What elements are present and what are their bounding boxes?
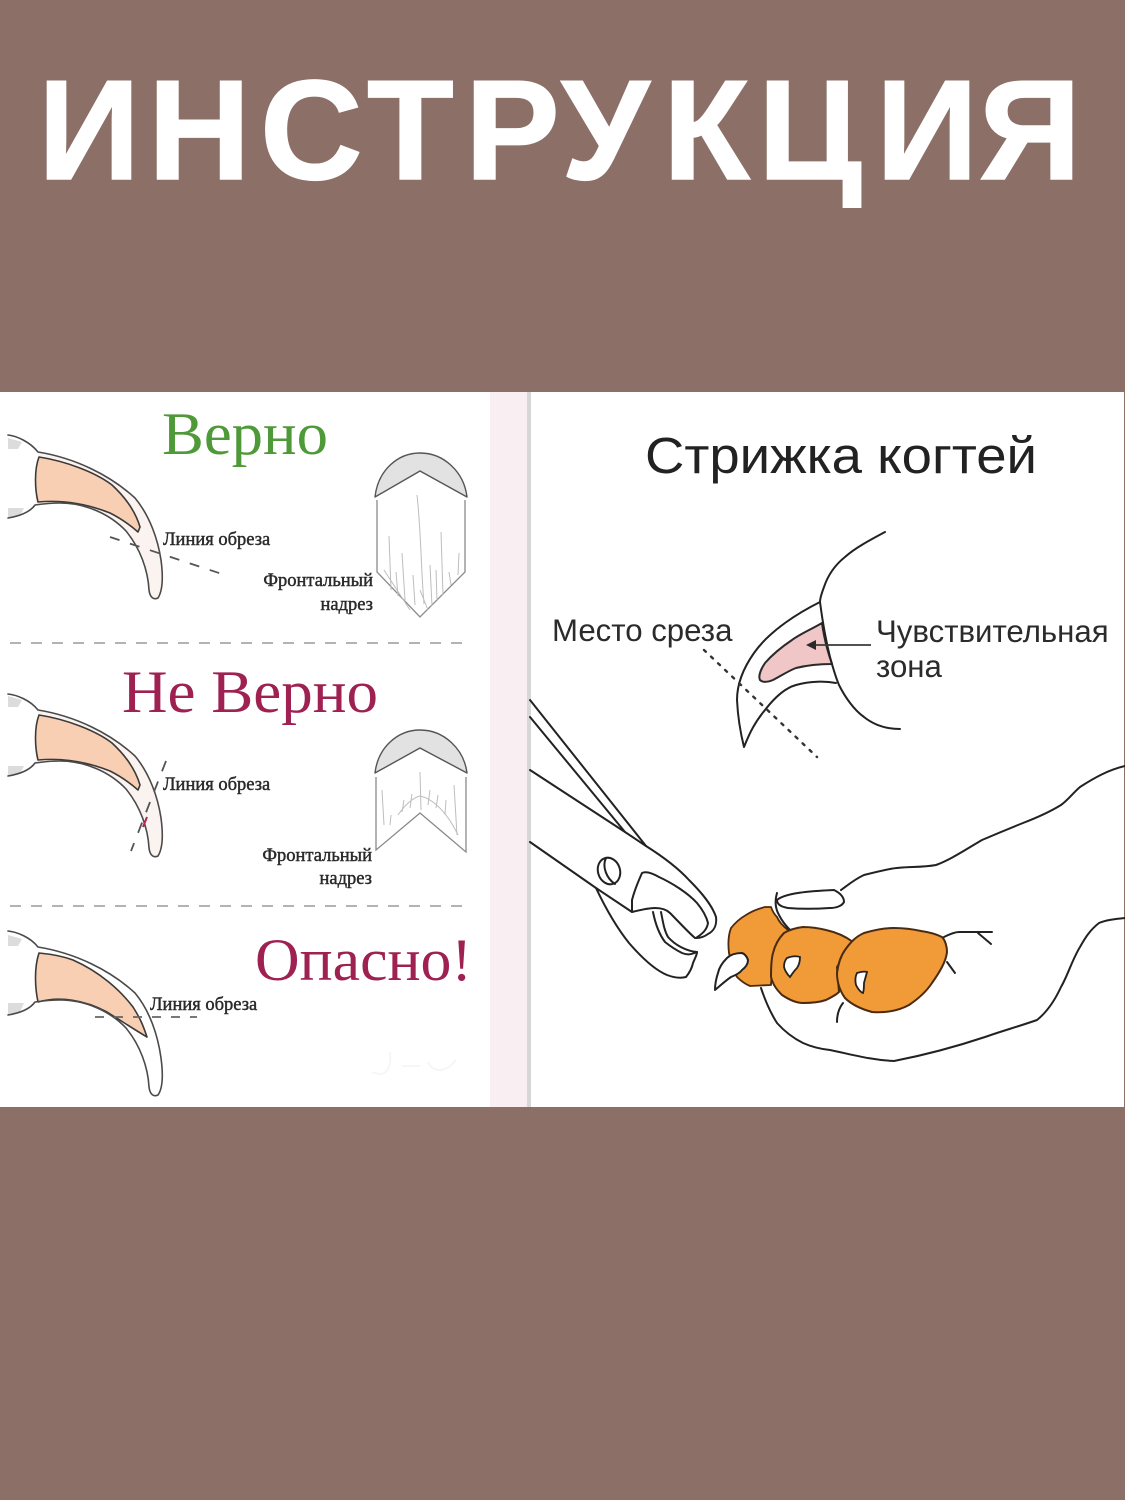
title: ИНСТРУКЦИЯ <box>38 51 1081 210</box>
heading: claw clipping: Стрижка когтей <box>645 427 1037 484</box>
nail front view: correct <box>375 453 467 617</box>
nail front view: wrong <box>375 730 467 852</box>
claw sheaths <box>784 956 800 977</box>
label: sensitive zone: зона <box>876 649 943 684</box>
claw anatomy diagram <box>704 532 900 757</box>
label: frontal cut: Фронтальный <box>262 846 372 866</box>
illustration: cat paw <box>715 766 1125 1061</box>
label: sensitive zone <box>876 614 1109 684</box>
claw diagram: dangerous cut <box>8 931 197 1096</box>
label: frontal cut <box>263 571 373 615</box>
label: sensitive zone: Чувствительная <box>876 614 1109 649</box>
panel: claw clipping guide <box>527 392 1125 1107</box>
label: frontal cut <box>262 846 372 889</box>
panel: claw trimming right and wrong <box>0 392 527 1107</box>
label: frontal cut: Фронтальный <box>263 571 373 591</box>
claw <box>715 953 748 990</box>
heading: wrong: Не Верно <box>122 659 378 725</box>
label: frontal cut: надрез <box>319 869 372 889</box>
label: frontal cut: надрез <box>320 595 373 615</box>
label: cut line: Линия обреза <box>150 995 257 1015</box>
illustration: nail clippers <box>530 700 716 978</box>
toe 3 <box>837 928 947 1012</box>
label: cut line: Линия обреза <box>163 775 270 795</box>
heading: dangerous: Опасно! <box>255 927 472 993</box>
label: cut place: Место среза <box>552 613 733 648</box>
thumb nail <box>777 890 844 909</box>
claw diagram: wrong cut <box>8 694 166 857</box>
label: cut line: Линия обреза <box>163 530 270 550</box>
heading: correct: Верно <box>162 401 328 467</box>
toe 2 <box>771 927 853 1003</box>
toe 1 <box>728 907 788 986</box>
arrow <box>806 640 871 650</box>
claw diagram: correct cut <box>8 435 222 599</box>
